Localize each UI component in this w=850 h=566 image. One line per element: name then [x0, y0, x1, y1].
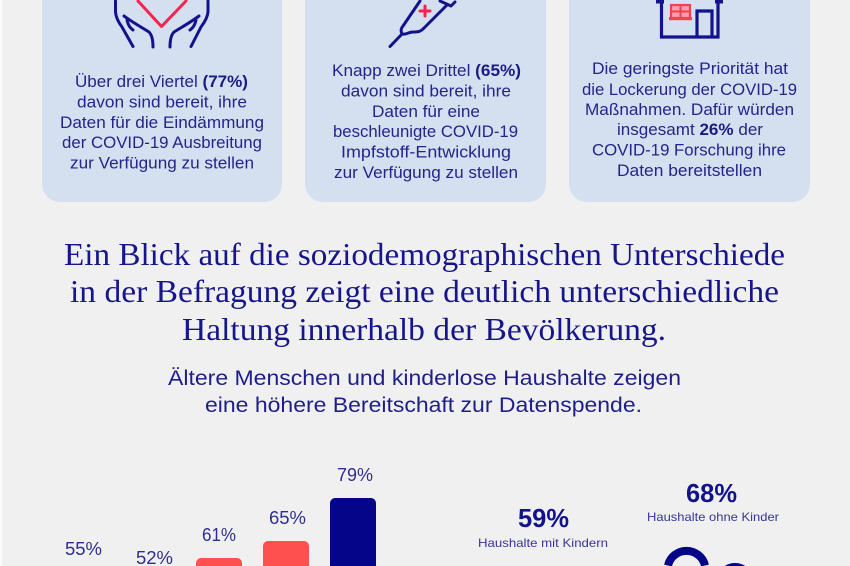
text: Über drei Viertel: Über drei Viertel (77%) — [75, 73, 248, 91]
text: Die geringste Priorität: Die geringste Priorität hat — [592, 60, 789, 78]
icon: family heads — [668, 551, 745, 566]
text: Über drei Viertel: Daten für die Eindämmung — [60, 114, 264, 132]
text: Die geringste Priorität: COVID-19 Forschung ihre — [592, 142, 786, 160]
text: Knapp zwei Drittel: davon sind bereit, ihre — [341, 82, 511, 100]
text: Über drei Viertel: der COVID-19 Ausbreitung — [62, 134, 262, 152]
heading: in der Befragung zeigt eine deutlich unterschiedliche — [70, 273, 779, 309]
heading: Ein Blick auf die soziodemographischen Unterschiede — [64, 236, 785, 272]
stat: Haushalte ohne Kinder: 68% — [686, 478, 737, 508]
text: Knapp zwei Drittel — [332, 62, 521, 182]
text: Die geringste Priorität: Daten bereitstellen — [617, 162, 762, 180]
text: Die geringste Priorität — [582, 60, 797, 180]
text: Über drei Viertel: davon sind bereit, ihre — [77, 94, 247, 112]
subheading: eine höhere Bereitschaft zur Datenspende. — [205, 394, 642, 417]
bar chart: age groups: 65% — [269, 507, 306, 528]
text: Die geringste Priorität: insgesamt 26% der — [617, 121, 764, 139]
text: Knapp zwei Drittel: Daten für eine — [372, 103, 480, 121]
panel: Impfstoff — [305, 0, 546, 202]
text: Knapp zwei Drittel: Knapp zwei Drittel (65%) — [332, 62, 521, 80]
stat: Haushalte ohne Kinder — [647, 478, 779, 524]
stat: Haushalte mit Kindern — [478, 503, 608, 550]
text: Knapp zwei Drittel: beschleunigte COVID-19 — [333, 123, 518, 141]
subheading — [168, 367, 681, 417]
stat: Haushalte ohne Kinder: Haushalte ohne Kinder — [647, 510, 779, 524]
icon: syringe — [390, 1, 455, 46]
panel: Lockerung — [569, 0, 810, 202]
icon: house — [656, 0, 723, 37]
bar chart: age groups: 79% — [337, 464, 373, 485]
panel: Eindämmung — [42, 0, 282, 202]
heading — [64, 236, 785, 347]
bar chart: age groups — [65, 464, 376, 566]
heading: Haltung innerhalb der Bevölkerung. — [182, 311, 666, 347]
text: Knapp zwei Drittel: zur Verfügung zu stellen — [334, 164, 518, 182]
stat: Haushalte mit Kindern: Haushalte mit Kindern — [478, 536, 608, 550]
text: Die geringste Priorität: Maßnahmen. Dafür würden — [585, 101, 794, 119]
text: Knapp zwei Drittel: Impfstoff-Entwicklung — [341, 144, 511, 162]
bar chart: age groups: 61% — [202, 524, 236, 545]
bar chart: age groups: 55% — [65, 538, 102, 559]
icon: hands holding heart — [116, 1, 208, 47]
stat: Haushalte mit Kindern: 59% — [518, 503, 569, 533]
text: Über drei Viertel — [60, 73, 264, 172]
subheading: Ältere Menschen und kinderlose Haushalte zeigen — [168, 367, 681, 390]
text: Die geringste Priorität: die Lockerung der COVID-19 — [582, 81, 797, 99]
text: Über drei Viertel: zur Verfügung zu stellen — [70, 154, 254, 172]
